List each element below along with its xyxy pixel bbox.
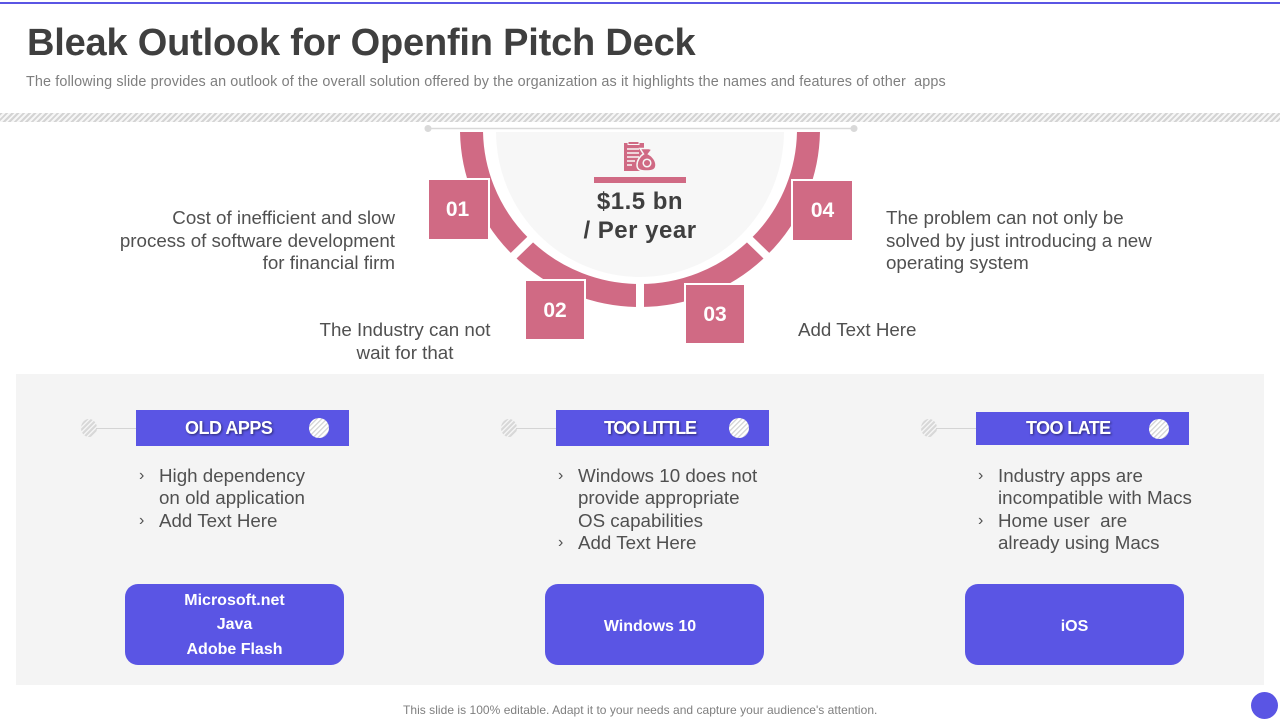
text: › <box>978 467 983 484</box>
text: item 01: Cost of inefficient and slow <box>172 207 395 228</box>
list: too little: OS capabilities <box>578 510 703 531</box>
box: old apps technologies: Java <box>217 616 252 633</box>
center value: $1.5 bn <box>597 188 683 215</box>
header: too late <box>976 412 1189 445</box>
ring segments <box>460 132 820 307</box>
panel: comparison <box>16 374 1264 685</box>
center value <box>583 188 697 244</box>
connector: too little <box>501 419 556 437</box>
list: too late: incompatible with Macs <box>998 487 1192 508</box>
connector line <box>424 125 858 132</box>
number badge 04: 04 <box>811 199 834 222</box>
connector: too late <box>921 419 976 437</box>
header: too late: TOO LATE <box>1026 418 1111 438</box>
top accent line <box>0 2 1280 4</box>
box: old apps technologies: Microsoft.net <box>184 592 285 609</box>
text: item 04: The problem can not only be <box>886 207 1124 228</box>
text: › <box>558 467 563 484</box>
text: item 02: wait for that <box>357 342 453 362</box>
chart: semicircle ring <box>424 125 858 307</box>
text: item 04: operating system <box>886 252 1029 273</box>
page marker <box>1251 692 1278 719</box>
hatched divider <box>0 113 1280 122</box>
header: old apps <box>136 410 349 446</box>
text: item 03: Add Text Here <box>798 319 916 340</box>
text: item 04: solved by just introducing a new <box>886 230 1152 250</box>
list: too late: already using Macs <box>998 532 1160 553</box>
list: too late: Home user are <box>998 510 1127 531</box>
text: › <box>978 512 983 529</box>
list: too late: Industry apps are <box>998 465 1143 486</box>
box: windows 10 <box>545 584 764 665</box>
list: old apps: on old application <box>159 487 305 508</box>
box: windows 10: Windows 10 <box>604 618 696 635</box>
number badge 01 <box>429 180 488 239</box>
icon underline bar <box>594 177 686 183</box>
list: too little <box>558 465 758 553</box>
number badge 04 <box>793 181 852 240</box>
center value: / Per year <box>583 216 697 244</box>
icon: report and money bag <box>624 142 656 171</box>
text: item 01: process of software development <box>120 230 395 250</box>
connector: old apps <box>81 419 136 437</box>
list: too little: Add Text Here <box>578 532 696 553</box>
list: old apps <box>139 465 305 531</box>
list: old apps: High dependency <box>159 465 305 486</box>
header: old apps: OLD APPS <box>185 418 272 438</box>
text: › <box>139 467 144 484</box>
text: › <box>139 512 144 529</box>
box: ios: iOS <box>1061 618 1088 635</box>
header: too little <box>556 410 769 446</box>
text: › <box>558 534 563 551</box>
list: old apps: Add Text Here <box>159 510 277 531</box>
text: item 01: for financial firm <box>263 252 395 273</box>
list: too late <box>978 465 1192 553</box>
text: item 02: The Industry can not <box>320 319 490 340</box>
text: item 01 <box>120 207 395 273</box>
subtitle: The following slide provides an outlook of the overall solution offered by the organization as it highlights the names and features of other apps <box>26 74 946 90</box>
text: item 04 <box>886 207 1152 273</box>
number badge 03 <box>686 285 744 343</box>
number badge 01: 01 <box>446 198 469 221</box>
list: too little: provide appropriate <box>578 487 740 508</box>
text: item 02 <box>320 319 490 362</box>
footer note: This slide is 100% editable. Adapt it to your needs and capture your audience's attention. <box>403 703 877 717</box>
center disc <box>496 0 784 277</box>
number badge 02 <box>526 281 584 339</box>
header: too little: TOO LITTLE <box>604 418 696 438</box>
box: ios <box>965 584 1184 665</box>
box: old apps technologies <box>125 584 344 665</box>
title: Bleak Outlook for Openfin Pitch Deck <box>27 22 695 64</box>
box: old apps technologies: Adobe Flash <box>186 641 282 658</box>
number badge 02: 02 <box>543 299 567 322</box>
list: too little: Windows 10 does not <box>578 465 757 486</box>
number badge 03: 03 <box>703 303 727 326</box>
